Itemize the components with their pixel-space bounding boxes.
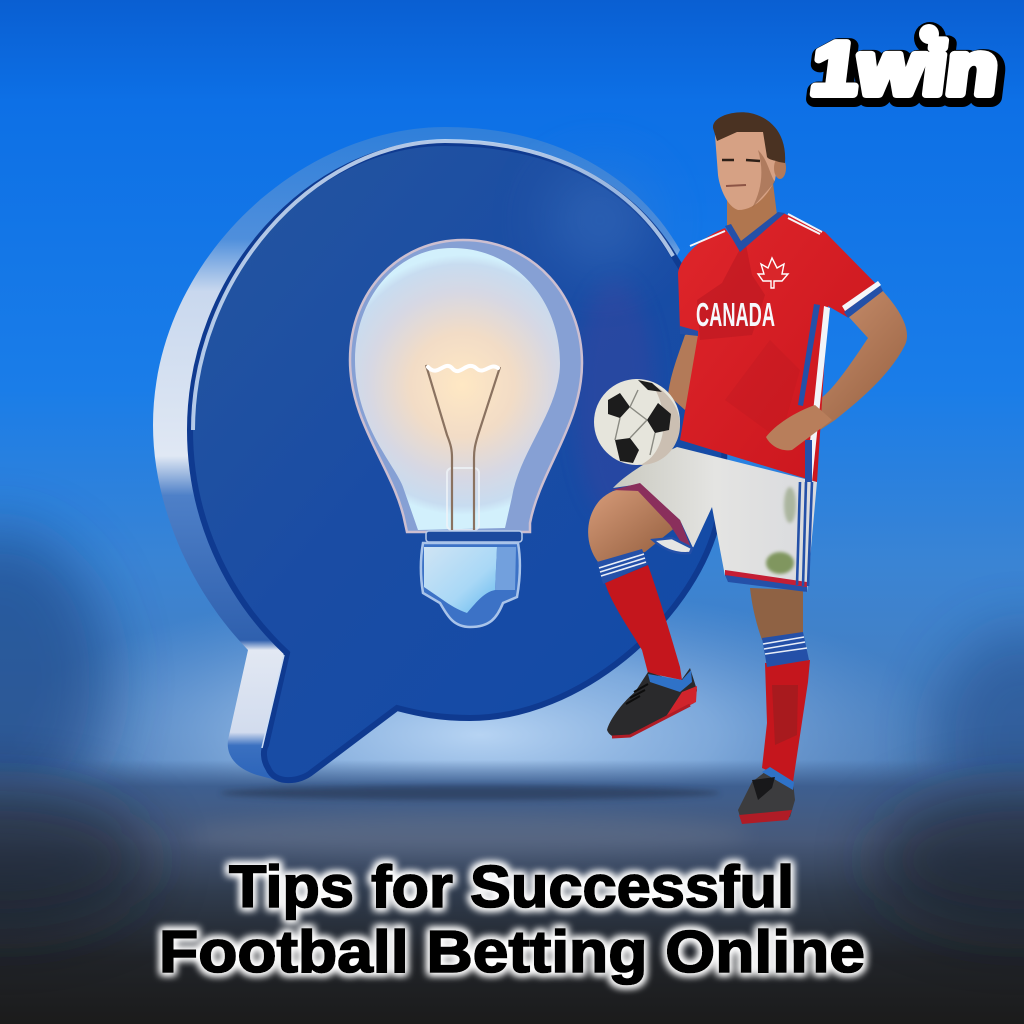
logo: 1win <box>807 22 1005 114</box>
left arm <box>668 330 700 410</box>
hand <box>766 405 832 450</box>
icon: football <box>594 379 680 465</box>
title: Football Betting Online <box>159 919 865 985</box>
logo outline: 1win <box>809 31 1005 114</box>
title: Tips for Successful <box>229 854 794 920</box>
jersey text: CANADA <box>696 296 775 333</box>
icon: light bulb <box>350 240 582 627</box>
bubble highlight <box>193 141 673 430</box>
right arm <box>766 290 907 450</box>
icon: filament <box>426 365 500 530</box>
raised boot <box>607 668 697 738</box>
standing leg <box>750 588 803 640</box>
speech bubble with light bulb <box>153 127 724 783</box>
jersey <box>678 212 883 482</box>
standing boot <box>738 767 795 824</box>
neck and head <box>713 112 786 250</box>
standing sock <box>762 632 810 782</box>
bubble face <box>190 143 724 780</box>
raised sock <box>597 549 682 680</box>
bubble rim <box>153 127 680 783</box>
title <box>159 854 865 985</box>
shorts <box>612 447 817 592</box>
icon: maple leaf <box>758 258 788 288</box>
football player <box>588 112 907 824</box>
raised leg <box>588 489 682 562</box>
logo fill: 1win <box>807 27 1003 110</box>
bulb base <box>421 531 522 627</box>
